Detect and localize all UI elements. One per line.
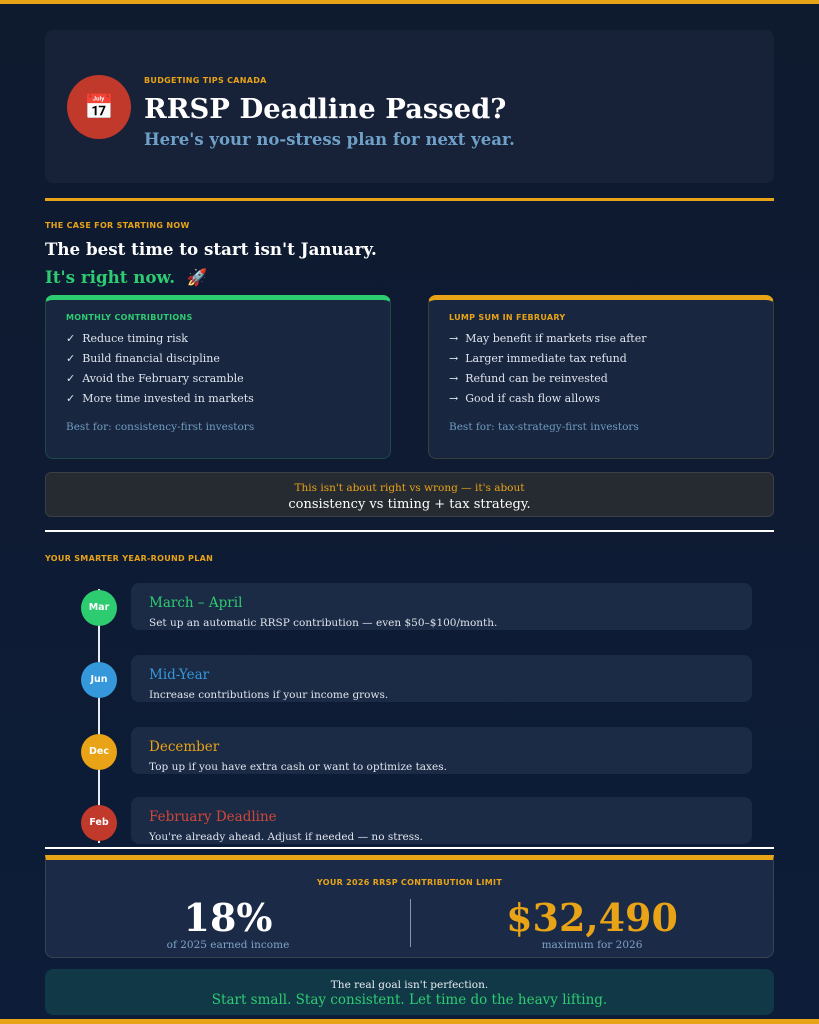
panel: monthly contributions: MONTHLY CONTRIBUTIONS — [66, 313, 193, 322]
stat: $32,490: maximum for 2026 — [542, 939, 642, 951]
step: February: February Deadline — [149, 809, 277, 825]
step: Mid-Year: Increase contributions if your income grows. — [149, 689, 388, 701]
bottom bar — [0, 1019, 819, 1024]
step: February: Feb — [89, 817, 109, 828]
panel: lump sum: → Refund can be reinvested — [449, 372, 608, 385]
step: March-April: Mar — [89, 602, 109, 613]
panel: lump sum: → Larger immediate tax refund — [449, 352, 627, 365]
step: December: December — [149, 739, 219, 755]
step: March-April — [81, 583, 752, 630]
callout: consistency vs timing: This isn't about right vs wrong — it's about — [295, 482, 524, 494]
panel: monthly contributions: ✓ More time invested in markets — [66, 392, 254, 405]
top bar — [0, 0, 819, 4]
step: February: You're already ahead. Adjust if needed — no stress. — [149, 831, 423, 843]
panel: monthly contributions: ✓ Reduce timing risk — [66, 332, 188, 345]
panel: lump sum: → Good if cash flow allows — [449, 392, 600, 405]
step: December: Dec — [89, 746, 109, 757]
step: March-April: Set up an automatic RRSP contribution — even $50–$100/month. — [149, 617, 497, 629]
stat: 18%: 18% — [184, 895, 272, 940]
subtitle: Here's your no-stress plan for next year. — [144, 130, 515, 149]
panel: monthly contributions: ✓ Build financial discipline — [66, 352, 220, 365]
step: Mid-Year: Jun — [90, 674, 108, 685]
panel: lump sum: Best for: tax-strategy-first investors — [449, 421, 639, 433]
step: December — [81, 727, 752, 774]
closing message — [45, 969, 774, 1015]
panel: contribution limit: YOUR 2026 RRSP CONTRIBUTION LIMIT — [317, 878, 502, 887]
section label: case: THE CASE FOR STARTING NOW — [45, 221, 190, 230]
panel: lump sum — [428, 295, 774, 459]
timeline — [81, 583, 752, 844]
callout: consistency vs timing — [45, 472, 774, 517]
closing message: Start small. Stay consistent. Let time do the heavy lifting. — [212, 992, 607, 1008]
icon: calendar circle — [67, 75, 131, 139]
closing message: The real goal isn't perfection. — [331, 979, 488, 991]
step: Mid-Year — [81, 655, 752, 702]
stat: 18%: of 2025 earned income — [167, 939, 289, 951]
panel: monthly contributions: Best for: consistency-first investors — [66, 421, 254, 433]
step: December: Top up if you have extra cash or want to optimize taxes. — [149, 761, 447, 773]
heading: best time: The best time to start isn't January. — [45, 239, 377, 259]
step: March-April: March – April — [149, 595, 242, 611]
section label: plan: YOUR SMARTER YEAR-ROUND PLAN — [45, 554, 213, 563]
panel: monthly contributions — [45, 295, 391, 459]
panel: contribution limit — [45, 855, 774, 958]
stat: 18% — [167, 895, 289, 951]
step: February — [81, 797, 752, 844]
panel: monthly contributions: ✓ Avoid the February scramble — [66, 372, 244, 385]
heading: right now: It's right now. 🚀 — [45, 267, 207, 287]
panel: lump sum: → May benefit if markets rise after — [449, 332, 646, 345]
header card — [45, 30, 774, 183]
callout: consistency vs timing: consistency vs timing + tax strategy. — [288, 497, 531, 512]
kicker: BUDGETING TIPS CANADA — [144, 76, 267, 85]
panel: lump sum: LUMP SUM IN FEBRUARY — [449, 313, 566, 322]
stat: $32,490: $32,490 — [506, 895, 678, 940]
icon: calendar circle: 📅 — [84, 93, 114, 121]
step: Mid-Year: Mid-Year — [149, 667, 209, 683]
title: RRSP Deadline Passed? — [144, 93, 506, 125]
